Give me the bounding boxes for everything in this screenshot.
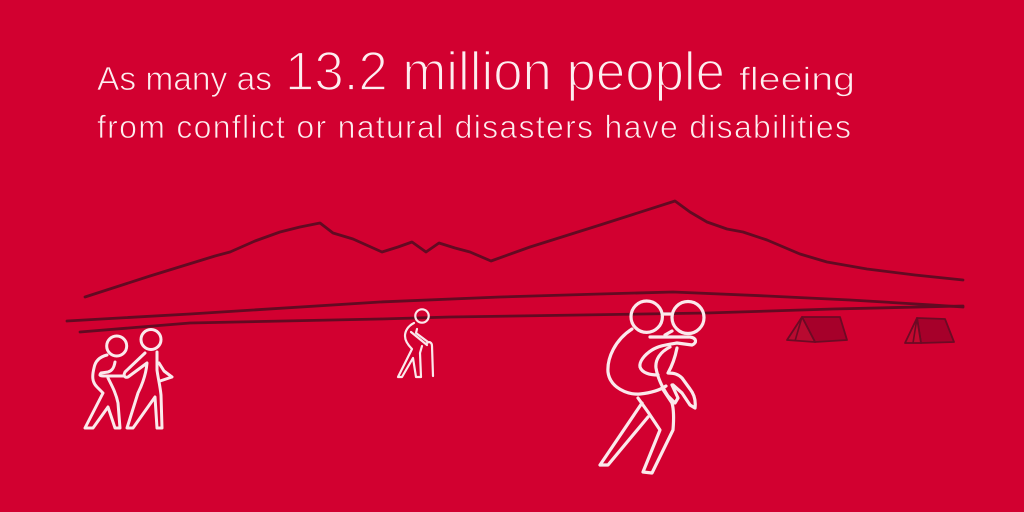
ground lines [67,292,963,332]
icon: small tent [905,318,954,343]
heading: from conflict or natural disasters have disabilities [97,109,851,145]
icon: large tent [787,317,847,342]
icon: two people helping each other walk [85,330,172,428]
mountain ridge line [85,201,963,297]
heading [97,40,855,145]
heading: As many as [97,60,272,97]
icon: person carrying another on their back [600,301,704,473]
icon: elderly person with cane [398,309,433,377]
heading: 13.2 million people [285,40,725,102]
heading: fleeing [739,61,855,97]
